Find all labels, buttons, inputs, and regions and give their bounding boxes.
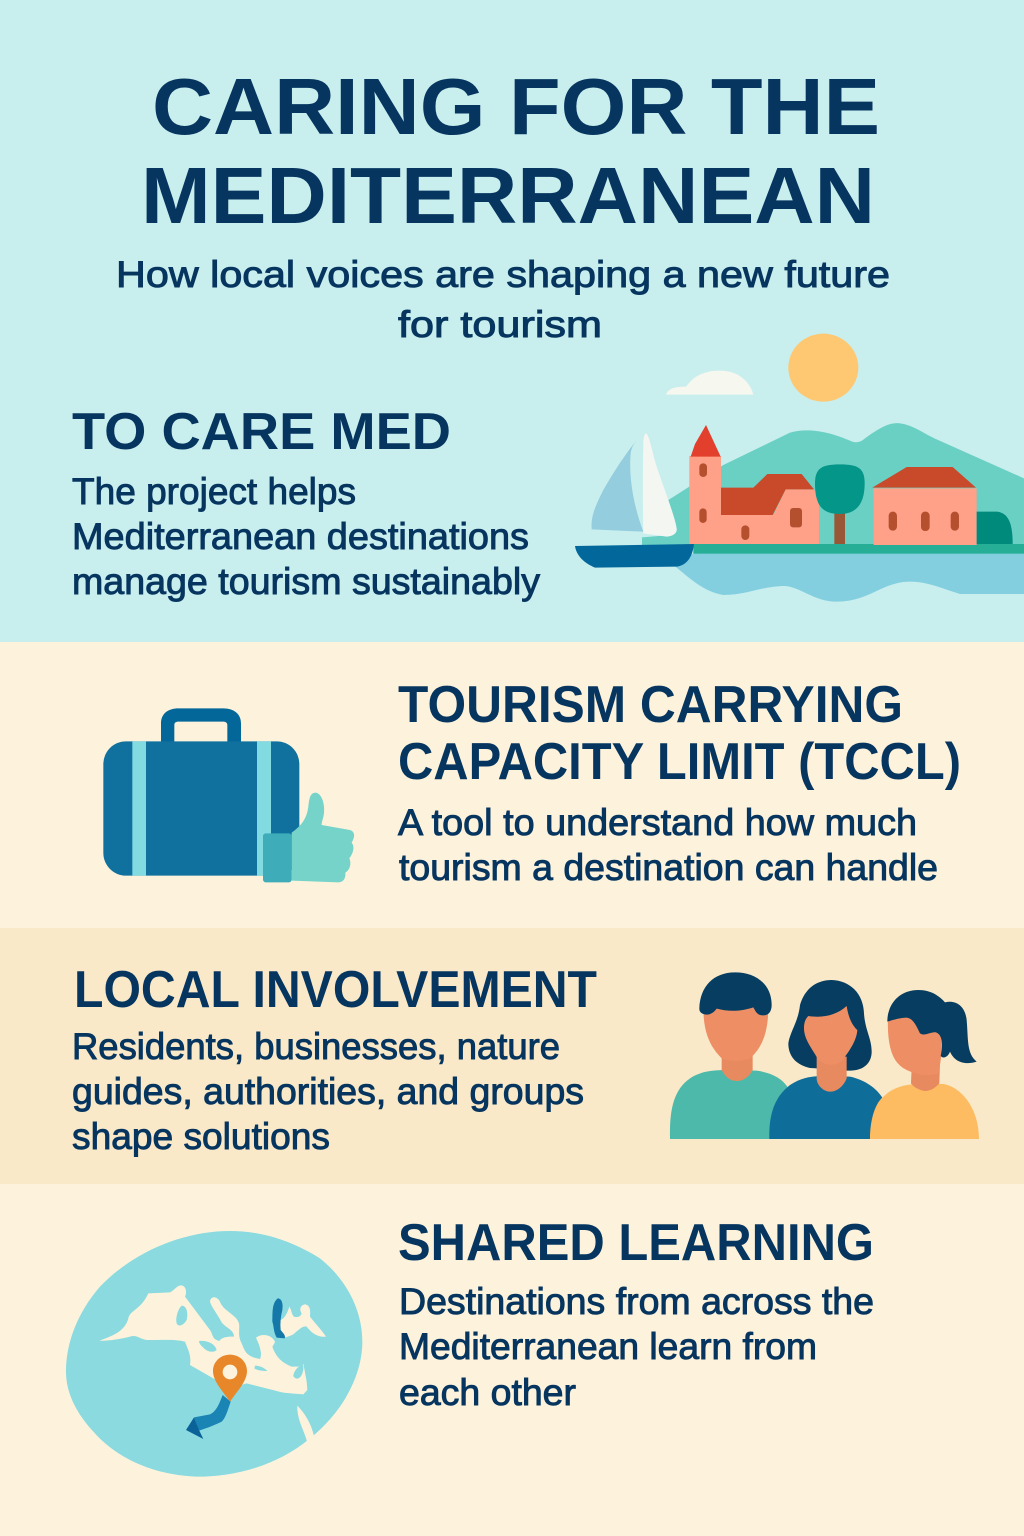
- icon: Mediterranean map with pin: [66, 1231, 362, 1477]
- land: [99, 1285, 307, 1394]
- text block: Shared Learning description: Destinations from across the: [399, 1281, 874, 1322]
- panel: Tourism Carrying Capacity Limit: [0, 642, 1024, 928]
- icon: suitcase with thumbs up: [103, 708, 354, 882]
- title: MEDITERRANEAN: [141, 151, 875, 240]
- text block: To Care Med description: Mediterranean destinations: [72, 516, 529, 557]
- text block: Local Involvement description: guides, authorities, and groups: [72, 1071, 584, 1112]
- heading: TCCL: CAPACITY LIMIT (TCCL): [398, 733, 961, 791]
- panel: header and To Care Med: [0, 0, 1024, 642]
- text block: TCCL description: tourism a destination can handle: [399, 847, 938, 888]
- red-roof house: [872, 467, 977, 545]
- sailboat: [575, 433, 694, 568]
- text block: Shared Learning description: each other: [399, 1372, 576, 1413]
- title: CARING FOR THE: [152, 62, 880, 151]
- location pin: [213, 1355, 247, 1402]
- land strip lower right: [297, 1406, 314, 1443]
- panel: Shared Learning: [0, 1184, 1024, 1536]
- person 3: [870, 990, 979, 1139]
- subtitle: [116, 254, 890, 345]
- heading: TCCL: [398, 676, 961, 791]
- icon: three people: [670, 972, 979, 1139]
- text block: TCCL description: [398, 802, 938, 888]
- dark blue lake: [272, 1298, 285, 1338]
- heading: TCCL: TOURISM CARRYING: [398, 676, 903, 734]
- cloud: [666, 371, 753, 395]
- text block: Local Involvement description: [72, 1026, 584, 1157]
- heading: To Care Med: TO CARE MED: [72, 403, 451, 461]
- text block: To Care Med description: manage tourism sustainably: [72, 561, 540, 602]
- text block: Shared Learning description: Mediterranean learn from: [399, 1326, 817, 1367]
- person 2: [769, 980, 883, 1139]
- mountains: [642, 423, 1024, 547]
- title: [141, 62, 880, 240]
- water: [673, 553, 1024, 602]
- bush: [977, 512, 1013, 544]
- text block: TCCL description: A tool to understand how much: [398, 802, 917, 843]
- subtitle: for tourism: [398, 304, 602, 345]
- text block: To Care Med description: The project helps: [72, 471, 356, 512]
- text block: To Care Med description: [72, 471, 540, 602]
- map blob: [66, 1231, 362, 1477]
- icon: coastal village with sailboat: [575, 334, 1024, 602]
- church and house: [689, 425, 819, 544]
- tree: [815, 464, 865, 544]
- shoreline: [693, 544, 1024, 554]
- subtitle: How local voices are shaping a new future: [116, 254, 890, 295]
- text block: Local Involvement description: Residents, businesses, nature: [72, 1026, 560, 1067]
- panel: Local Involvement: [0, 928, 1024, 1184]
- person 1: [670, 972, 787, 1139]
- route: [186, 1395, 231, 1439]
- text block: Local Involvement description: shape solutions: [72, 1116, 330, 1157]
- heading: Local Involvement: LOCAL INVOLVEMENT: [74, 961, 597, 1019]
- text block: Shared Learning description: [399, 1281, 874, 1413]
- sun: [788, 334, 858, 402]
- heading: Shared Learning: SHARED LEARNING: [398, 1214, 874, 1272]
